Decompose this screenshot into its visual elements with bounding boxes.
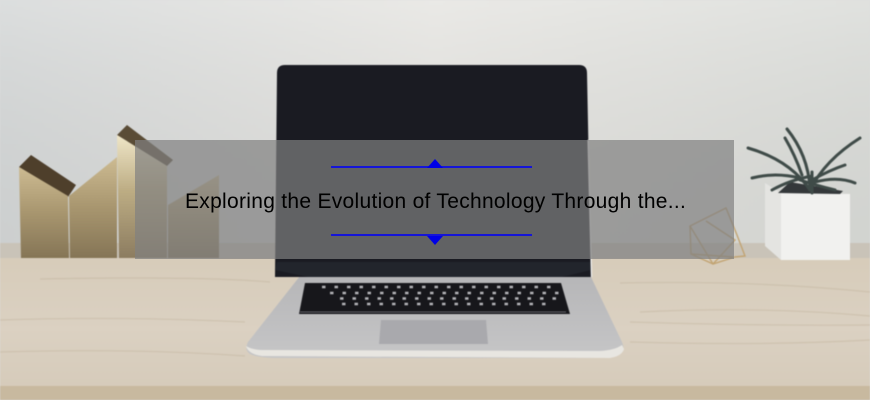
wall	[0, 0, 870, 260]
bottom blue divider	[331, 234, 532, 236]
brass vases	[19, 125, 219, 258]
shelf shade band	[0, 243, 870, 259]
laptop lid and screen	[275, 65, 592, 277]
keyboard	[299, 283, 570, 314]
translucent title overlay	[135, 140, 734, 259]
trackpad	[379, 320, 488, 344]
plant leaves	[748, 129, 860, 193]
icon: up triangle	[427, 159, 443, 168]
top blue divider	[331, 166, 532, 168]
plant pot	[765, 182, 850, 260]
table front edge	[0, 386, 870, 400]
wire prism ornament	[690, 208, 745, 264]
laptop base	[246, 276, 624, 358]
wood table	[0, 258, 870, 400]
icon: down triangle	[427, 236, 443, 245]
title: Exploring the Evolution of Technology Through the...	[185, 190, 686, 213]
